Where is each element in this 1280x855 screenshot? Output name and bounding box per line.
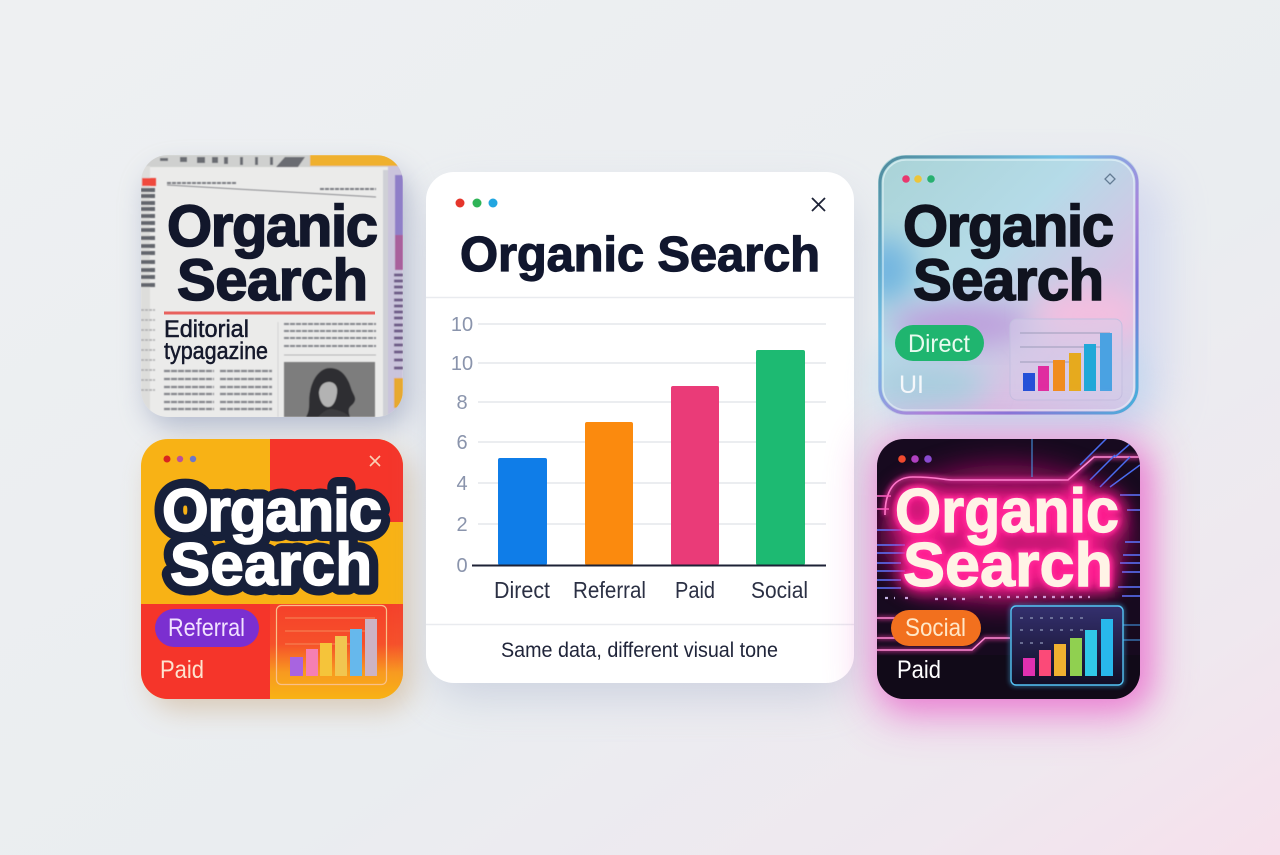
y axis labels: 6	[456, 432, 468, 454]
neon headline: Organic	[895, 477, 1119, 546]
editorial sub heading	[164, 316, 268, 365]
neon headline: Search	[903, 531, 1113, 600]
glass headline: Organic	[903, 194, 1114, 259]
panel: glass UI card	[858, 155, 1165, 428]
neon headline: Organic	[895, 477, 1119, 546]
pop headline	[162, 477, 382, 598]
panel: editorial card	[141, 155, 409, 428]
infographic canvas	[133, 155, 1280, 855]
pop headline: Organic	[162, 477, 382, 544]
neon headline: Organic	[895, 477, 1119, 546]
portrait photo	[284, 362, 375, 417]
bars	[498, 458, 547, 565]
x axis labels: Paid	[675, 577, 715, 603]
editorial headline	[168, 202, 378, 302]
x axis labels	[494, 577, 808, 603]
label: UI: UI	[899, 371, 924, 399]
x axis labels: Referral	[573, 577, 646, 603]
y axis labels	[451, 314, 473, 577]
y axis labels: 10	[451, 353, 473, 375]
y axis labels: 10	[451, 314, 473, 336]
bar chart	[451, 314, 826, 603]
pill: Referral	[155, 609, 259, 647]
pill: Social	[891, 610, 981, 646]
pop headline: Search	[170, 531, 372, 598]
y axis labels: 2	[456, 514, 468, 536]
editorial sub heading: typagazine	[164, 338, 268, 365]
pill: Referral: Referral	[168, 614, 245, 642]
y axis labels: 0	[456, 555, 468, 577]
neon headline	[895, 477, 1119, 600]
main heading: Organic Search	[460, 228, 820, 282]
y axis labels: 4	[456, 473, 468, 495]
column rule	[278, 322, 279, 417]
glass headline: Search	[913, 248, 1104, 313]
close icon	[812, 198, 825, 211]
label: Paid: Paid	[160, 656, 204, 684]
masthead small print	[167, 183, 376, 189]
caption: Same data, different visual tone	[501, 639, 778, 662]
panel: neon card	[868, 430, 1154, 720]
pop headline: Search	[170, 531, 372, 598]
pill: Direct: Direct	[908, 330, 970, 358]
window dots	[164, 456, 196, 462]
pill: Direct	[895, 325, 984, 361]
neon headline: Search	[903, 531, 1113, 600]
editorial sub heading: Editorial	[164, 316, 249, 343]
panel: bold pop card	[141, 439, 412, 710]
window dots	[898, 455, 932, 463]
pop headline: Organic	[162, 477, 382, 544]
pill: Social: Social	[905, 614, 966, 642]
red rule	[164, 312, 375, 314]
close icon	[370, 456, 380, 466]
neon headline: Search	[903, 531, 1113, 600]
mini bar chart	[1010, 319, 1122, 400]
diamond icon	[1105, 174, 1115, 184]
circuit traces	[877, 435, 1140, 650]
window dots	[902, 175, 935, 183]
y axis labels: 8	[456, 392, 468, 414]
x axis labels: Direct	[494, 577, 551, 603]
label: Paid: Paid	[897, 656, 941, 684]
x axis labels: Social	[751, 577, 808, 603]
glass headline	[903, 194, 1114, 313]
editorial headline: Organic	[167, 194, 378, 259]
mini bar chart	[1011, 606, 1123, 685]
editorial headline: Search	[177, 248, 368, 313]
body copy lines	[284, 324, 376, 346]
window dots	[456, 198, 498, 208]
mini bar chart	[276, 606, 386, 684]
panel: main chart card	[426, 172, 854, 696]
